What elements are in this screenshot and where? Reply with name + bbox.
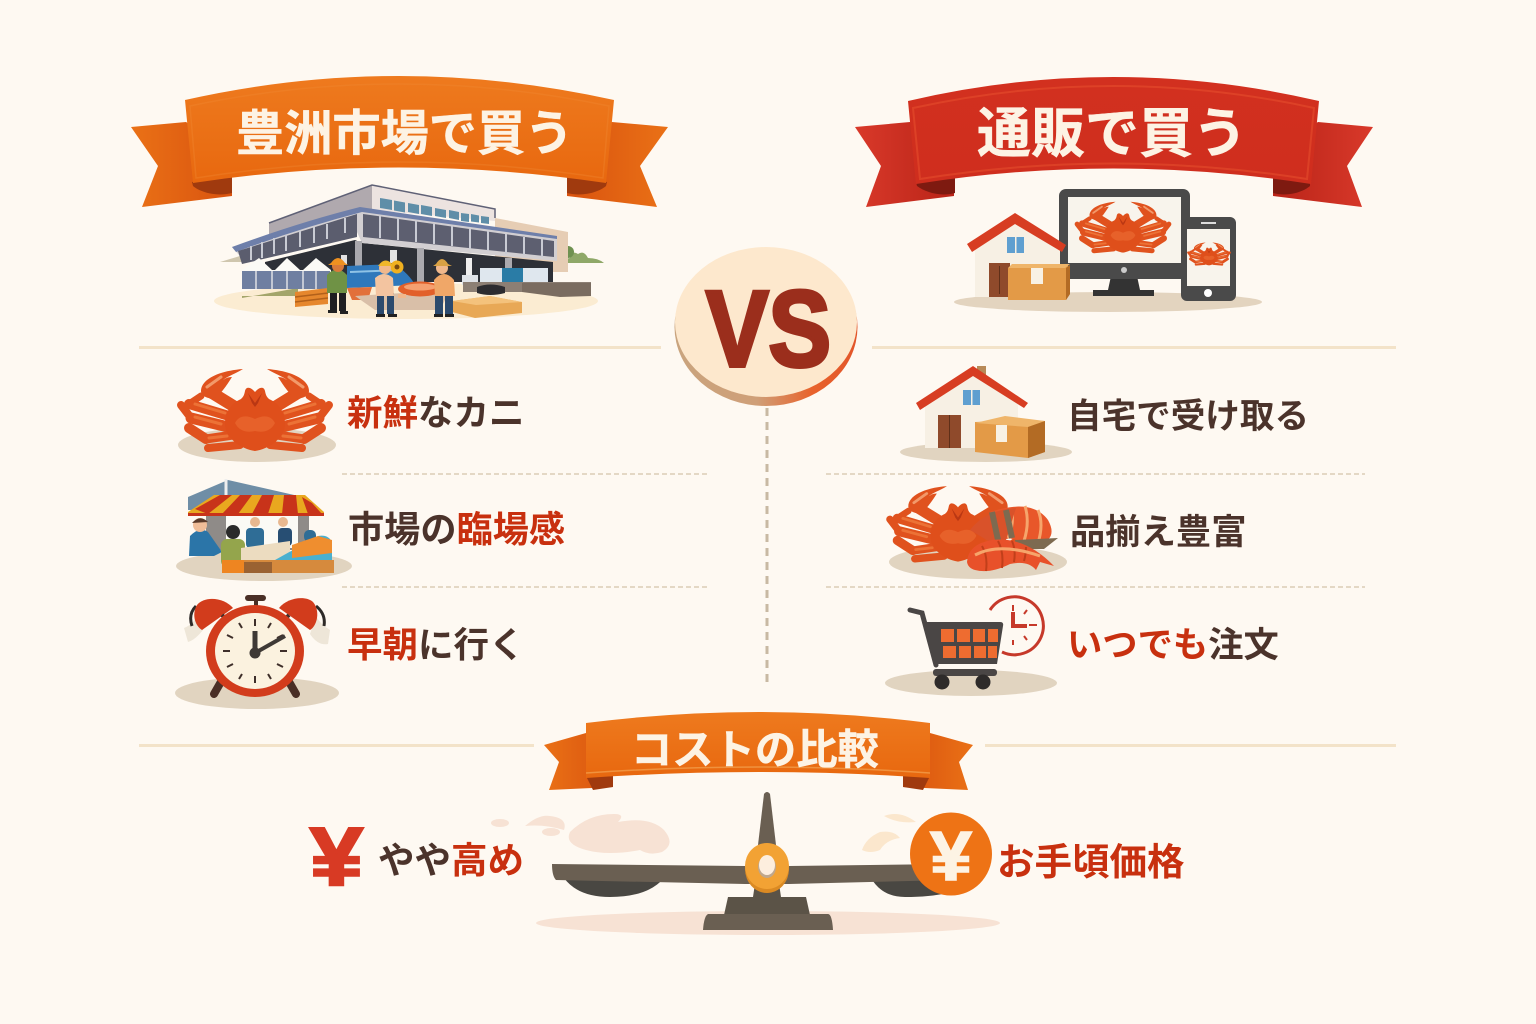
banner: コストの比較: コストの比較 — [631, 727, 879, 773]
icon: house and parcel — [900, 366, 1072, 462]
illustration: Toyosu market building with workers — [214, 185, 604, 319]
worker: green — [327, 258, 348, 314]
icon: yen red: ¥ — [310, 810, 363, 903]
VS badge — [674, 247, 858, 406]
illustration: balance scale — [491, 792, 1000, 935]
banner: 通販で買う — [855, 77, 1373, 207]
banner: 豊洲市場で買う — [131, 76, 668, 207]
label: 市場の臨場感: 市場の臨場感 — [348, 509, 565, 550]
worker: overalls — [375, 260, 406, 317]
divider: section lines — [139, 348, 1396, 746]
label: いつでも注文: いつでも注文 — [1067, 626, 1279, 665]
banner: 通販で買う: 通販で買う — [977, 104, 1247, 164]
illustration: home, monitor and smartphone with crab — [954, 189, 1262, 312]
icon: crab — [178, 369, 336, 462]
icon: shopping cart and clock — [885, 597, 1057, 696]
label: 早朝に行く: 早朝に行く — [347, 625, 525, 665]
label: 新鮮なカニ: 新鮮なカニ — [347, 393, 525, 433]
icon: market stall — [176, 479, 352, 581]
banner: コストの比較 — [544, 712, 973, 790]
icon: alarm clock — [175, 595, 339, 709]
worker: straw hat — [433, 259, 455, 317]
VS badge: VS — [706, 268, 831, 389]
icon: seafood assortment — [889, 486, 1067, 579]
label: お手頃価格: お手頃価格 — [997, 841, 1184, 883]
label: 自宅で受け取る: 自宅で受け取る — [1067, 398, 1309, 436]
banner: 豊洲市場で買う: 豊洲市場で買う — [236, 107, 573, 161]
label: 品揃え豊富: 品揃え豊富 — [1070, 513, 1246, 552]
label: やや高め: やや高め — [378, 840, 524, 881]
illustration: balance scale: ¥ — [930, 817, 972, 895]
